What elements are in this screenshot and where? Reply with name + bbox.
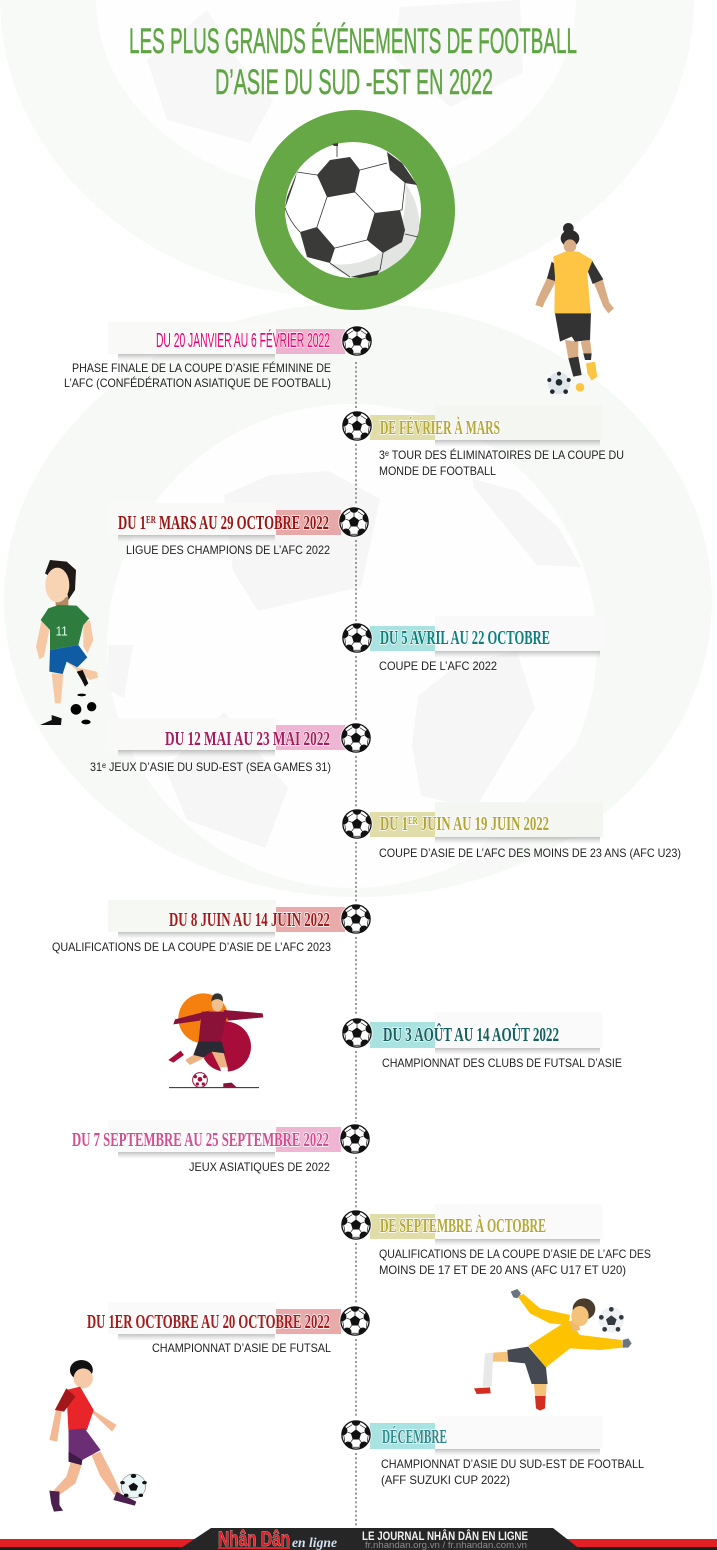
date: ER: [146, 514, 156, 526]
icon: ball: [339, 901, 373, 934]
footer text: LE JOURNAL NHÂN DÂN EN LIGNE: [362, 1528, 528, 1543]
title: D’ASIE DU SUD -EST EN 2022: [215, 63, 493, 102]
event 12: [339, 1416, 644, 1487]
description: QUALIFICATIONS DE LA COUPE D’ASIE DE L’AFC 2023: [52, 940, 331, 954]
description: CHAMPIONNAT DES CLUBS DE FUTSAL D’ASIE: [382, 1056, 622, 1070]
date: DÉCEMBRE: [382, 1425, 447, 1448]
date: JUIN AU 19 JUIN 2022: [418, 813, 549, 835]
background: upper football watermark: [0, 0, 694, 298]
icon: ball: [337, 504, 371, 537]
description: JEUX ASIATIQUES DE 2022: [189, 1160, 330, 1174]
footer text: [362, 1528, 528, 1550]
date: DE SEPTEMBRE À OCTOBRE: [380, 1214, 546, 1237]
icon: ball: [339, 720, 373, 753]
footer banner: [0, 1528, 717, 1550]
date: DU 8 JUIN AU 14 JUIN 2022: [169, 909, 330, 931]
icon: ball: [340, 806, 374, 839]
event 8: [340, 1012, 622, 1070]
illustration: kicking player in crimson: [168, 993, 263, 1088]
date: MARS AU 29 OCTOBRE 2022: [156, 512, 329, 534]
description: PHASE FINALE DE LA COUPE D’ASIE FÉMININE DE: [72, 360, 331, 375]
date: DE FÉVRIER À MARS: [380, 416, 500, 439]
icon: ball: [338, 1303, 372, 1336]
event 9: [72, 1120, 372, 1174]
icon: ball: [340, 408, 374, 441]
icon: ball: [339, 1207, 373, 1240]
description: CHAMPIONNAT D’ASIE DE FUTSAL: [152, 1341, 331, 1355]
description: MOINS DE 17 ET DE 20 ANS (AFC U17 ET U20): [379, 1263, 626, 1277]
illustration: player in green number 11: 11: [56, 624, 68, 639]
description: L’AFC (CONFÉDÉRATION ASIATIQUE DE FOOTBALL): [64, 375, 331, 390]
date: DU 12 MAI AU 23 MAI 2022: [165, 728, 330, 750]
icon: large football in green ring: [255, 110, 455, 310]
icon: ball: [339, 1417, 373, 1450]
illustration: player in green number 11: [36, 560, 98, 725]
title: [129, 22, 577, 102]
illustration: woman player in yellow: [535, 223, 614, 394]
event 10: [339, 1204, 651, 1277]
date: DU 1ER OCTOBRE AU 20 OCTOBRE 2022: [87, 1311, 330, 1333]
date: DU 20 JANVIER AU 6 FÉVRIER 2022: [156, 329, 330, 352]
event 6: [340, 802, 681, 860]
date: DU 3 AOÛT AU 14 AOÛT 2022: [383, 1022, 559, 1046]
illustration: player in red: [49, 1360, 147, 1512]
icon: ball: [340, 323, 374, 356]
description: 3ᵉ TOUR DES ÉLIMINATOIRES DE LA COUPE DU: [379, 447, 624, 462]
footer text: fr.nhandan.org.vn / fr.nhandan.com.vn: [365, 1540, 527, 1550]
event 11: [87, 1302, 372, 1355]
description: COUPE D’ASIE DE L’AFC DES MOINS DE 23 ANS (AFC U23): [379, 846, 681, 860]
date: DU 1: [380, 813, 424, 835]
description: LIGUE DES CHAMPIONS DE L’AFC 2022: [126, 543, 330, 557]
timeline dotted line: [355, 362, 357, 1526]
event 5: [90, 718, 373, 774]
icon: ball: [340, 620, 374, 653]
date: DU 7 SEPTEMBRE AU 25 SEPTEMBRE 2022: [72, 1129, 329, 1151]
icon: ball: [338, 1121, 372, 1154]
event 2: [340, 405, 624, 478]
description: (AFF SUZUKI CUP 2022): [381, 1473, 510, 1487]
date: DU 5 AVRIL AU 22 OCTOBRE: [380, 627, 550, 649]
illustration: goalkeeper: [474, 1289, 632, 1411]
event 7: [52, 900, 373, 954]
event 1: [64, 322, 374, 390]
description: MONDE DE FOOTBALL: [379, 464, 496, 478]
description: 31ᵉ JEUX D’ASIE DU SUD-EST (SEA GAMES 31): [90, 760, 331, 774]
icon: ball: [340, 1015, 374, 1048]
description: COUPE DE L’AFC 2022: [379, 659, 497, 673]
event 3: [108, 503, 371, 557]
date: ER: [408, 815, 418, 827]
description: QUALIFICATIONS DE LA COUPE D’ASIE DE L’AFC DES: [379, 1247, 651, 1261]
date: DU 1: [118, 512, 162, 534]
event 4: [340, 616, 603, 673]
background: lower football watermark: [4, 303, 712, 897]
description: CHAMPIONNAT D’ASIE DU SUD-EST DE FOOTBALL: [381, 1457, 644, 1471]
